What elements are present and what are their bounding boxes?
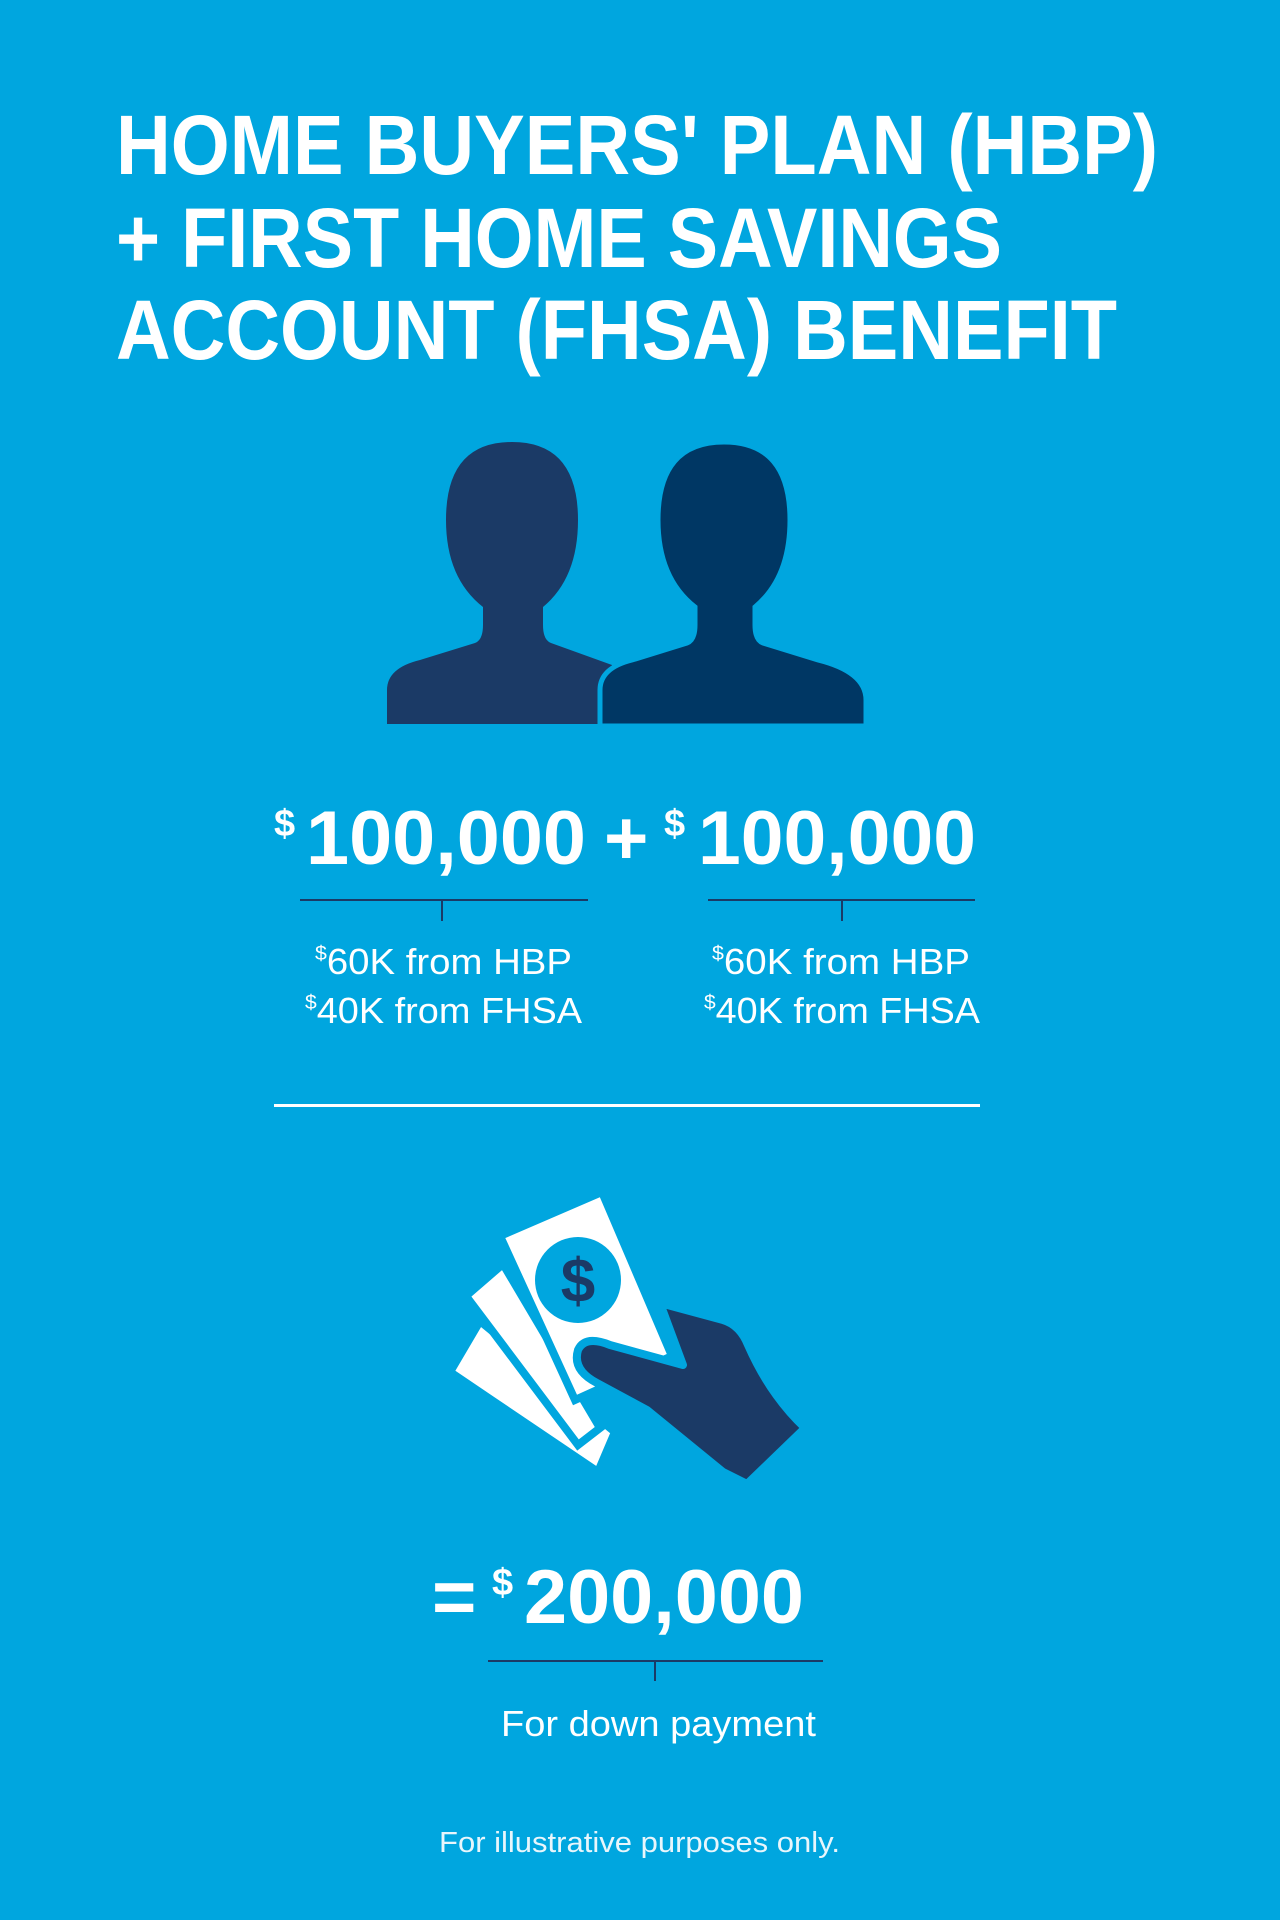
bracket lines [300, 900, 975, 1681]
title: HOME BUYERS' PLAN (HBP) [116, 98, 1158, 192]
icon: two people [387, 442, 866, 726]
right breakdown: 60K from HBP [724, 941, 970, 982]
right breakdown [704, 941, 980, 1031]
total amount: 200,000 [524, 1555, 804, 1640]
divider [274, 1104, 980, 1107]
left amount: 100,000 [306, 796, 586, 881]
right breakdown: 40K from FHSA [716, 990, 980, 1031]
icon: hand with money [450, 1192, 805, 1484]
total amount: = [432, 1555, 476, 1640]
left breakdown: 40K from FHSA [317, 990, 582, 1031]
title [116, 98, 1158, 377]
right amount: $ [664, 803, 685, 845]
footnote: For illustrative purposes only. [439, 1827, 840, 1859]
left breakdown: $ [305, 992, 317, 1014]
right amount: 100,000 [698, 796, 976, 881]
right breakdown: $ [712, 943, 724, 965]
caption: down payment: For down payment [501, 1703, 816, 1744]
icon: hand with money: $ [561, 1247, 595, 1316]
left breakdown [305, 941, 582, 1031]
left breakdown: $ [315, 943, 327, 965]
left breakdown: 60K from HBP [327, 941, 572, 982]
total amount: $ [492, 1562, 513, 1604]
title: ACCOUNT (FHSA) BENEFIT [116, 283, 1117, 377]
title: + FIRST HOME SAVINGS [116, 191, 1002, 285]
right breakdown: $ [704, 992, 716, 1014]
plus sign: + [604, 796, 648, 881]
left amount: $ [274, 803, 295, 845]
